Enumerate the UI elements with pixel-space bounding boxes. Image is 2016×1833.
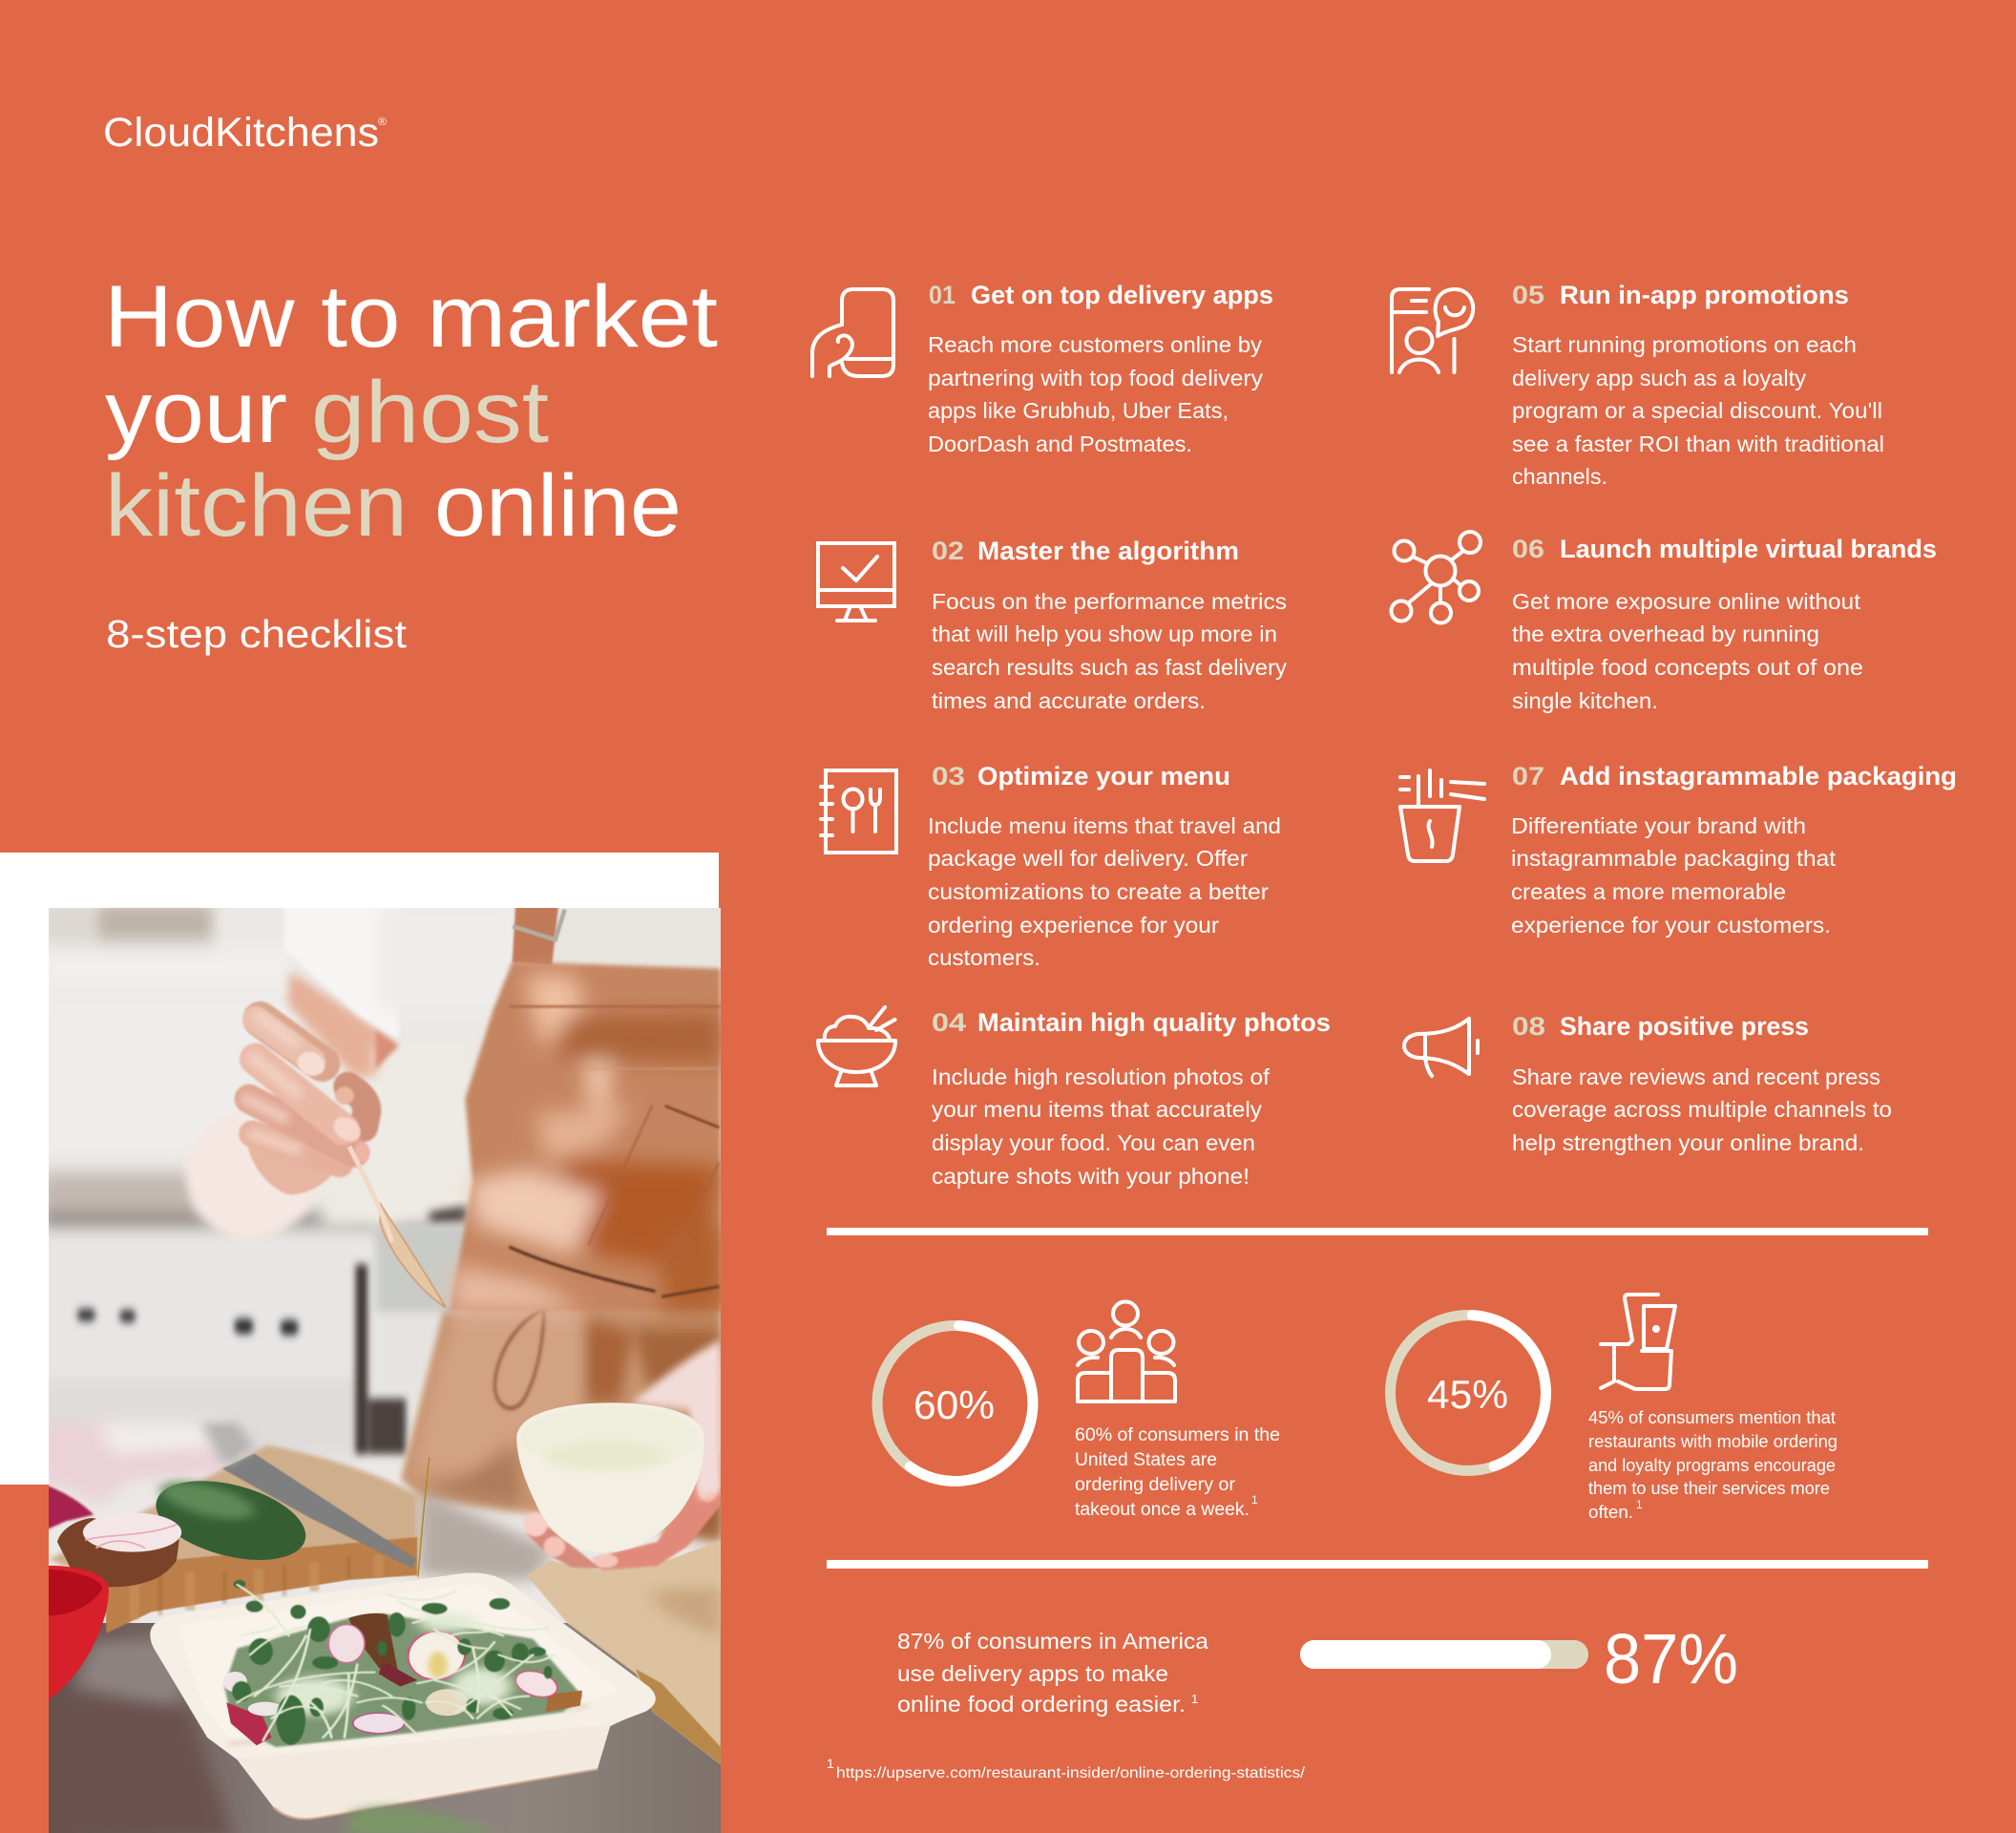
cutting board bbox=[49, 1444, 417, 1582]
knife bbox=[222, 1454, 416, 1569]
stat: 87% consumers: 87% bbox=[1604, 1619, 1738, 1698]
step 05: Run in-app promotions: channels. bbox=[1512, 464, 1607, 489]
icon: monitor with check bbox=[818, 543, 894, 621]
step 02: Master the algorithm: 02 bbox=[932, 537, 964, 565]
wrist above the bowl bbox=[631, 1340, 721, 1499]
donut chart 60%: 60% bbox=[914, 1382, 995, 1427]
title: kitchen bbox=[105, 457, 408, 555]
icon: menu book bbox=[821, 770, 896, 853]
step 03: Optimize your menu: customizations to create a better bbox=[928, 879, 1269, 904]
step 01: Get on top delivery apps: Reach more customers online by bbox=[928, 332, 1263, 357]
title: your bbox=[105, 364, 287, 461]
step 06: Launch multiple virtual brands: multiple food concepts out of one bbox=[1512, 655, 1863, 680]
step 01: Get on top delivery apps: DoorDash and Postmates. bbox=[928, 432, 1192, 456]
step 01: Get on top delivery apps bbox=[812, 281, 1273, 456]
step 08: Share positive press: help strengthen your online brand. bbox=[1512, 1130, 1864, 1155]
stat: 87% consumers: 1 bbox=[1191, 1692, 1198, 1706]
salad bbox=[224, 1613, 582, 1747]
stat: 87% consumers: online food ordering easier. bbox=[897, 1692, 1186, 1717]
stat: 60% consumers: 60% of consumers in the bbox=[1075, 1425, 1280, 1445]
kitchen background and lower apron bbox=[42, 903, 721, 1540]
title: online bbox=[434, 457, 682, 555]
stat: 60% consumers: takeout once a week. bbox=[1075, 1500, 1250, 1520]
step 06: Launch multiple virtual brands: the extra overhead by running bbox=[1512, 622, 1819, 646]
onions on the board bbox=[49, 1422, 221, 1504]
donut chart 45% bbox=[1386, 1311, 1550, 1475]
footnote: https://upserve.com/restaurant-insider/online-ordering-statistics/ bbox=[836, 1765, 1306, 1781]
step 02: Master the algorithm: that will help you show up more in bbox=[932, 622, 1277, 646]
logo: CloudKitchens: ® bbox=[378, 116, 387, 128]
icon: megaphone bbox=[1404, 1019, 1478, 1076]
step 06: Launch multiple virtual brands: Launch multiple virtual brands bbox=[1560, 535, 1937, 563]
step 08: Share positive press bbox=[1404, 1012, 1892, 1155]
stat: 60% consumers bbox=[873, 1302, 1280, 1520]
step 07: Add instagrammable packaging: Differentiate your brand with bbox=[1511, 813, 1806, 838]
icon: network hub bbox=[1392, 532, 1480, 622]
step 03: Optimize your menu bbox=[821, 762, 1281, 970]
stat: 87% consumers: 87% of consumers in America bbox=[897, 1629, 1208, 1654]
step 05: Run in-app promotions: program or a special discount. You'll bbox=[1512, 398, 1882, 423]
stat: 45% consumers: 45% of consumers mention that bbox=[1588, 1408, 1836, 1427]
progress bar 87% bbox=[1300, 1640, 1588, 1669]
apron and shirt torso bbox=[375, 905, 723, 1312]
wooden bowl bbox=[57, 1518, 179, 1587]
step 02: Master the algorithm: search results such as fast delivery bbox=[932, 655, 1288, 680]
step 04: Maintain high quality photos: 04 bbox=[932, 1008, 966, 1037]
cucumber bbox=[156, 1481, 305, 1560]
step 04: Maintain high quality photos: capture shots with your phone! bbox=[932, 1164, 1250, 1189]
step 07: Add instagrammable packaging: creates a more memorable bbox=[1511, 879, 1786, 904]
title: ghost bbox=[311, 364, 549, 461]
step 02: Master the algorithm: Focus on the performance metrics bbox=[932, 589, 1287, 614]
icon: people on podium bbox=[1078, 1302, 1175, 1401]
step 07: Add instagrammable packaging: Add instagrammable packaging bbox=[1560, 762, 1957, 790]
step 04: Maintain high quality photos bbox=[818, 1007, 1331, 1189]
step 05: Run in-app promotions: 05 bbox=[1512, 281, 1544, 309]
step 05: Run in-app promotions: Start running promotions on each bbox=[1512, 332, 1857, 357]
foreground blurred herbs bbox=[348, 1807, 498, 1833]
step 02: Master the algorithm bbox=[818, 537, 1288, 713]
stat: 45% consumers: 1 bbox=[1636, 1498, 1643, 1511]
step 06: Launch multiple virtual brands: 06 bbox=[1512, 535, 1544, 563]
step 04: Maintain high quality photos: Maintain high quality photos bbox=[977, 1008, 1331, 1037]
footnote bbox=[827, 1756, 1306, 1781]
step 07: Add instagrammable packaging: instagrammable packaging that bbox=[1511, 846, 1837, 871]
step 08: Share positive press: 08 bbox=[1512, 1012, 1545, 1041]
step 05: Run in-app promotions: delivery app such as a loyalty bbox=[1512, 366, 1807, 390]
counter, board, bowl and tray bbox=[36, 1422, 721, 1833]
tray bbox=[150, 1572, 656, 1819]
step 05: Run in-app promotions: Run in-app promotions bbox=[1560, 281, 1849, 309]
stat: 60% consumers: 1 bbox=[1251, 1493, 1258, 1506]
icon: hand holding phone bbox=[812, 289, 893, 376]
title: How to market bbox=[104, 268, 718, 366]
stat: 45% consumers: often. bbox=[1588, 1503, 1633, 1522]
step 04: Maintain high quality photos: Include high resolution photos of bbox=[932, 1064, 1270, 1089]
footnote: 1 bbox=[827, 1756, 834, 1771]
step 02: Master the algorithm: times and accurate orders. bbox=[932, 688, 1206, 713]
stat: 60% consumers: United States are bbox=[1075, 1450, 1217, 1470]
step 01: Get on top delivery apps: partnering with top food delivery bbox=[928, 366, 1264, 390]
step 08: Share positive press: Share rave reviews and recent press bbox=[1512, 1064, 1880, 1089]
step 03: Optimize your menu: Include menu items that travel and bbox=[928, 813, 1281, 838]
donut chart 60% bbox=[873, 1321, 1037, 1485]
icon: packaging cup bbox=[1400, 770, 1484, 861]
step 01: Get on top delivery apps: apps like Grubhub, Uber Eats, bbox=[928, 398, 1228, 423]
step 01: Get on top delivery apps: 01 bbox=[929, 281, 956, 309]
step 03: Optimize your menu: customers. bbox=[928, 945, 1040, 970]
right wooden board bbox=[527, 1540, 721, 1764]
step 01: Get on top delivery apps: Get on top delivery apps bbox=[971, 281, 1273, 309]
step 06: Launch multiple virtual brands: single kitchen. bbox=[1512, 688, 1658, 713]
title bbox=[104, 268, 718, 555]
white bowl, tray and salad bbox=[150, 1402, 704, 1833]
step 05: Run in-app promotions: see a faster ROI than with traditional bbox=[1512, 432, 1884, 456]
step 07: Add instagrammable packaging: 07 bbox=[1512, 762, 1544, 790]
stat: 45% consumers: them to use their services more bbox=[1588, 1479, 1830, 1498]
red bowl bbox=[47, 1566, 109, 1701]
white block behind photo bbox=[0, 853, 719, 1485]
step 04: Maintain high quality photos: your menu items that accurately bbox=[932, 1097, 1263, 1122]
step 04: Maintain high quality photos: display your food. You can even bbox=[932, 1130, 1255, 1155]
stat: 45% consumers: restaurants with mobile ordering bbox=[1588, 1432, 1838, 1451]
stat: 45% consumers bbox=[1386, 1295, 1838, 1522]
icon: rice bowl bbox=[818, 1007, 895, 1085]
step 07: Add instagrammable packaging: experience for your customers. bbox=[1511, 913, 1831, 938]
subtitle: 8-step checklist bbox=[106, 612, 408, 656]
stat: 87% consumers bbox=[897, 1619, 1738, 1717]
step 05: Run in-app promotions bbox=[1392, 281, 1884, 489]
counter surface bbox=[49, 1623, 721, 1833]
step 08: Share positive press: coverage across multiple channels to bbox=[1512, 1097, 1892, 1122]
step 03: Optimize your menu: Optimize your menu bbox=[977, 762, 1230, 790]
step 03: Optimize your menu: 03 bbox=[932, 762, 965, 790]
step 02: Master the algorithm: Master the algorithm bbox=[977, 537, 1239, 565]
stat: 60% consumers: ordering delivery or bbox=[1075, 1475, 1236, 1495]
stat: 87% consumers: use delivery apps to make bbox=[897, 1661, 1168, 1686]
icon: hand holding mobile device bbox=[1601, 1295, 1675, 1389]
step 03: Optimize your menu: package well for delivery. Offer bbox=[928, 846, 1248, 871]
hand holding spoon bbox=[246, 1016, 392, 1242]
stat: 45% consumers: and loyalty programs encourage bbox=[1588, 1456, 1836, 1475]
step 06: Launch multiple virtual brands bbox=[1392, 532, 1937, 713]
step 06: Launch multiple virtual brands: Get more exposure online without bbox=[1512, 589, 1861, 614]
step 08: Share positive press: Share positive press bbox=[1560, 1012, 1809, 1041]
icon: app promotion with speech bubble bbox=[1392, 289, 1473, 372]
shirt, forearm and upper arm bbox=[185, 898, 399, 1240]
photo: chef drizzling oil over a salad tray bbox=[36, 898, 723, 1833]
serving hand bbox=[523, 1451, 721, 1570]
step 07: Add instagrammable packaging bbox=[1400, 762, 1957, 938]
logo: CloudKitchens: CloudKitchens bbox=[103, 110, 379, 156]
donut chart 45%: 45% bbox=[1427, 1372, 1508, 1417]
step 03: Optimize your menu: ordering experience for your bbox=[928, 913, 1219, 938]
